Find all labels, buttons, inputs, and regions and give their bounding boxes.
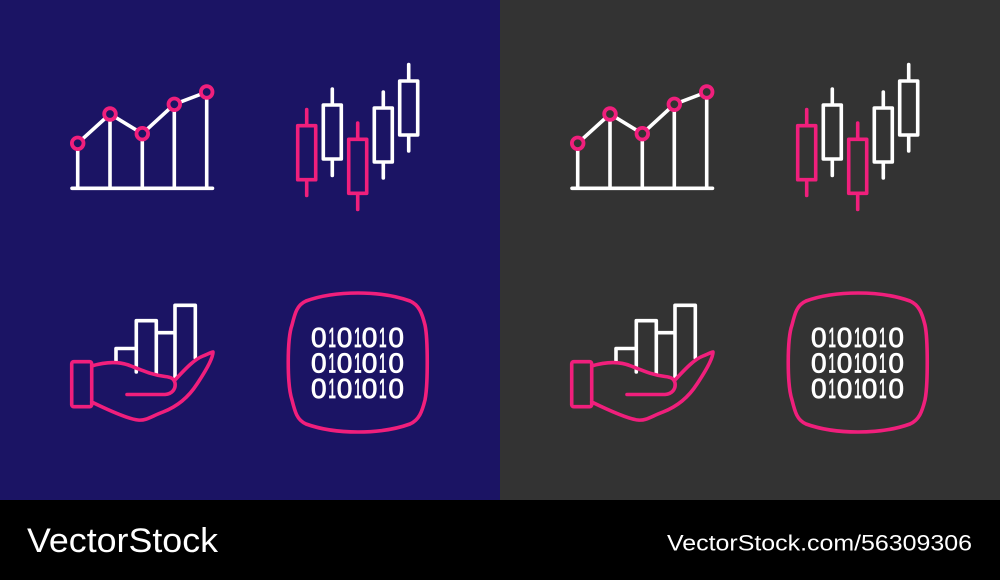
binary digits: 1 <box>354 347 362 379</box>
binary digits: 0 <box>862 348 877 378</box>
binary digits: 0 <box>337 373 352 404</box>
binary digits: 1 <box>879 322 887 353</box>
icon: candlestick chart <box>298 64 418 210</box>
footer: image URL text: VectorStock.com/56309306 <box>667 530 972 556</box>
icon: candlestick chart <box>798 64 918 210</box>
binary digits <box>311 322 404 404</box>
binary digits: 0 <box>837 322 852 353</box>
binary digits: 1 <box>379 347 387 379</box>
binary digits: 1 <box>328 373 336 404</box>
binary digits: 0 <box>811 348 827 378</box>
panel: charcoal background <box>500 0 1000 500</box>
binary digits: 0 <box>337 322 352 353</box>
binary digits: 0 <box>311 373 327 404</box>
binary digits: 0 <box>337 348 352 378</box>
icon set: navy panel <box>72 64 427 432</box>
icon: line chart <box>72 86 212 188</box>
binary digits: 0 <box>388 322 404 353</box>
icon: binary code badge <box>788 293 927 432</box>
binary digits: 1 <box>828 322 836 353</box>
panel: navy background <box>0 0 500 500</box>
binary digits: 0 <box>362 348 377 378</box>
binary digits: 0 <box>388 373 404 404</box>
binary digits: 1 <box>854 347 862 379</box>
binary digits: 1 <box>854 322 862 353</box>
binary digits: 0 <box>888 348 904 378</box>
binary digits: 1 <box>354 373 362 404</box>
binary digits: 1 <box>879 373 887 404</box>
binary digits: 0 <box>388 348 404 378</box>
binary digits: 1 <box>828 347 836 379</box>
binary digits: 1 <box>354 322 362 353</box>
icon: hand holding bar chart <box>572 305 713 420</box>
icon: binary code badge <box>288 293 427 432</box>
binary digits: 1 <box>854 373 862 404</box>
binary digits: 0 <box>837 373 852 404</box>
binary digits: 1 <box>828 373 836 404</box>
binary digits: 0 <box>862 322 877 353</box>
icon set: charcoal panel <box>572 64 927 432</box>
binary digits: 0 <box>837 348 852 378</box>
binary digits: 0 <box>311 348 327 378</box>
binary digits: 0 <box>862 373 877 404</box>
binary digits: 1 <box>379 373 387 404</box>
icon: line chart <box>572 86 712 188</box>
binary digits <box>811 322 904 404</box>
binary digits: 1 <box>328 347 336 379</box>
binary digits: 0 <box>811 373 827 404</box>
binary digits: 1 <box>328 322 336 353</box>
icon: hand holding bar chart <box>72 305 213 420</box>
footer band <box>0 500 1000 580</box>
binary digits: 1 <box>879 347 887 379</box>
binary digits: 1 <box>379 322 387 353</box>
binary digits: 0 <box>362 322 377 353</box>
binary digits: 0 <box>311 322 327 353</box>
footer: VectorStock logo text: VectorStock <box>27 522 219 560</box>
binary digits: 0 <box>362 373 377 404</box>
binary digits: 0 <box>888 373 904 404</box>
binary digits: 0 <box>811 322 827 353</box>
binary digits: 0 <box>888 322 904 353</box>
